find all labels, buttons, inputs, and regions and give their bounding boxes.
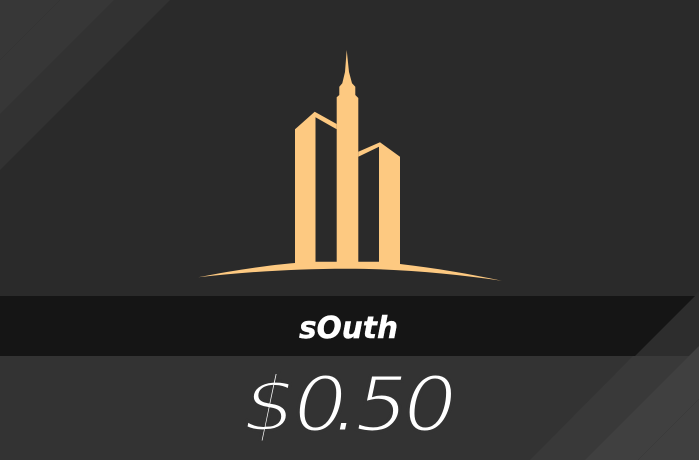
left tower (295, 112, 337, 264)
icon: city skyline logo (198, 50, 502, 281)
ground arc (198, 262, 502, 281)
central spire tower (337, 50, 358, 268)
name banner (0, 296, 695, 356)
right tower (358, 142, 400, 266)
name label: sOuth (299, 311, 398, 346)
price: $0.50 (243, 360, 457, 449)
